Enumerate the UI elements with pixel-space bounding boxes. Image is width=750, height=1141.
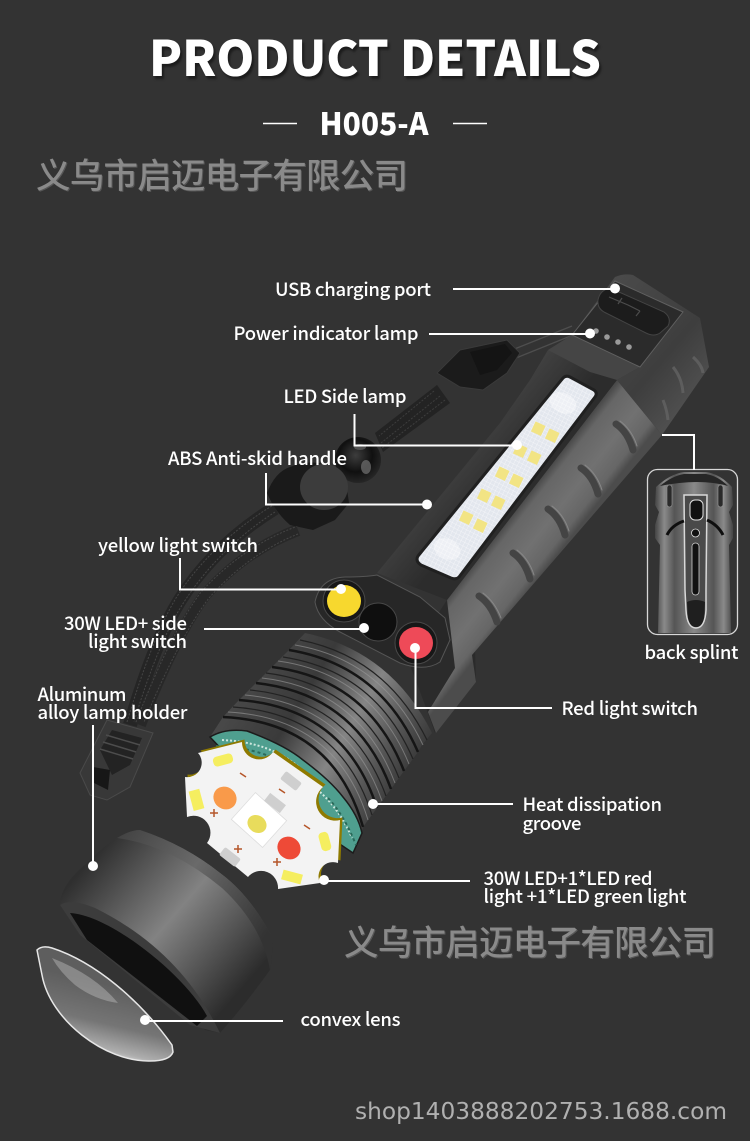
callout: aluminum alloy lamp holder: alloy lamp holder (38, 699, 188, 725)
yellow button (323, 580, 365, 622)
callout: red light switch (410, 643, 698, 721)
callout: led configuration (319, 865, 687, 909)
callout: 30w led side light switch: 30W LED+ side (64, 610, 187, 636)
model heading: H005-A (320, 99, 429, 144)
heat dissipation fins (210, 633, 432, 842)
led chips (459, 421, 560, 533)
callout: aluminum alloy lamp holder: Aluminum (38, 681, 126, 707)
back splint inset (648, 470, 738, 634)
callout: 30w led side light switch: light switch (88, 628, 187, 654)
inset top cap (660, 474, 728, 486)
callout: convex lens (140, 1006, 401, 1032)
red button (395, 622, 437, 664)
usb rubber cap (598, 288, 669, 335)
wrist strap (80, 326, 578, 800)
led star board (185, 740, 342, 889)
watermark: company name lower: 义乌市启迈电子有限公司 (344, 915, 716, 965)
black button (359, 603, 397, 641)
panel bright ends (546, 388, 580, 418)
head corner ridges (663, 357, 703, 420)
callout: usb charging port (275, 276, 620, 302)
callout: heat dissipation groove: Heat dissipation (522, 791, 662, 817)
strap webbing upper (375, 385, 450, 452)
red led (273, 832, 305, 864)
bead (335, 437, 381, 483)
callout: heat dissipation groove (368, 791, 662, 836)
strap webbing lower band one (130, 508, 275, 725)
side slots (667, 485, 672, 507)
led side panel (417, 376, 596, 579)
front rim (60, 902, 220, 1033)
callout: abs anti-skid handle: ABS Anti-skid handle (168, 445, 347, 471)
watermark: company name top: 义乌市启迈电子有限公司 (36, 148, 408, 198)
callout: power indicator lamp: Power indicator lamp (234, 320, 418, 346)
lamp holder (60, 830, 272, 1033)
callout: usb charging port: USB charging port (275, 276, 432, 302)
side face of handle (428, 380, 662, 733)
lens highlight (52, 958, 118, 1003)
small grey components (219, 771, 302, 867)
convex lens (37, 947, 173, 1061)
circuit board behind led star (210, 730, 362, 853)
usb icon on cap (609, 297, 640, 316)
grip ridges (479, 424, 633, 622)
centre led (231, 793, 287, 847)
flashlight tail head (572, 274, 709, 435)
dark top face of handle (377, 335, 640, 600)
flashlight (210, 274, 709, 842)
clip tip (687, 600, 705, 627)
strap end tab (80, 720, 153, 800)
callout: yellow light switch: yellow light switch (98, 532, 258, 558)
switch plate (315, 575, 450, 667)
curved seams (667, 520, 723, 535)
strap cord (512, 326, 578, 358)
head top face (572, 281, 683, 367)
callout: heat dissipation groove: groove (522, 810, 582, 836)
board plate (185, 742, 340, 889)
callout: back splint: back splint (644, 639, 739, 665)
body shelf under head (548, 335, 640, 380)
callout: red light switch: Red light switch (562, 695, 698, 721)
cord lock (267, 462, 349, 530)
callout: power indicator lamp (234, 320, 595, 346)
buckle (437, 340, 520, 390)
callout: back splint (644, 435, 739, 665)
title: PRODUCT DETAILS (149, 20, 601, 91)
callout: yellow light switch (98, 532, 346, 594)
dark collar below switches (408, 600, 476, 733)
strap webbing lower band two (140, 530, 298, 725)
watermark: shop url: shop1403888202753.1688.com (355, 1097, 727, 1125)
back chamfer (117, 830, 272, 970)
callout: led side lamp (284, 383, 522, 450)
callout: led configuration: light +1*LED green light (484, 883, 687, 909)
board gold edge (188, 740, 342, 886)
callout: led configuration: 30W LED+1*LED red (484, 865, 652, 891)
small yellow leds (189, 753, 332, 884)
callout: abs anti-skid handle (168, 445, 432, 510)
clip (684, 495, 707, 628)
polarity marks (210, 773, 310, 866)
inset frame (648, 470, 738, 634)
callout: led side lamp: LED Side lamp (284, 383, 406, 409)
inset flashlight body (655, 472, 733, 633)
lamp holder interior (70, 913, 207, 1026)
orange led (209, 782, 241, 814)
indicator lights (593, 328, 632, 350)
callout: convex lens: convex lens (300, 1006, 401, 1032)
callout: 30w led side light switch (64, 610, 369, 654)
callout: aluminum alloy lamp holder (38, 681, 188, 871)
